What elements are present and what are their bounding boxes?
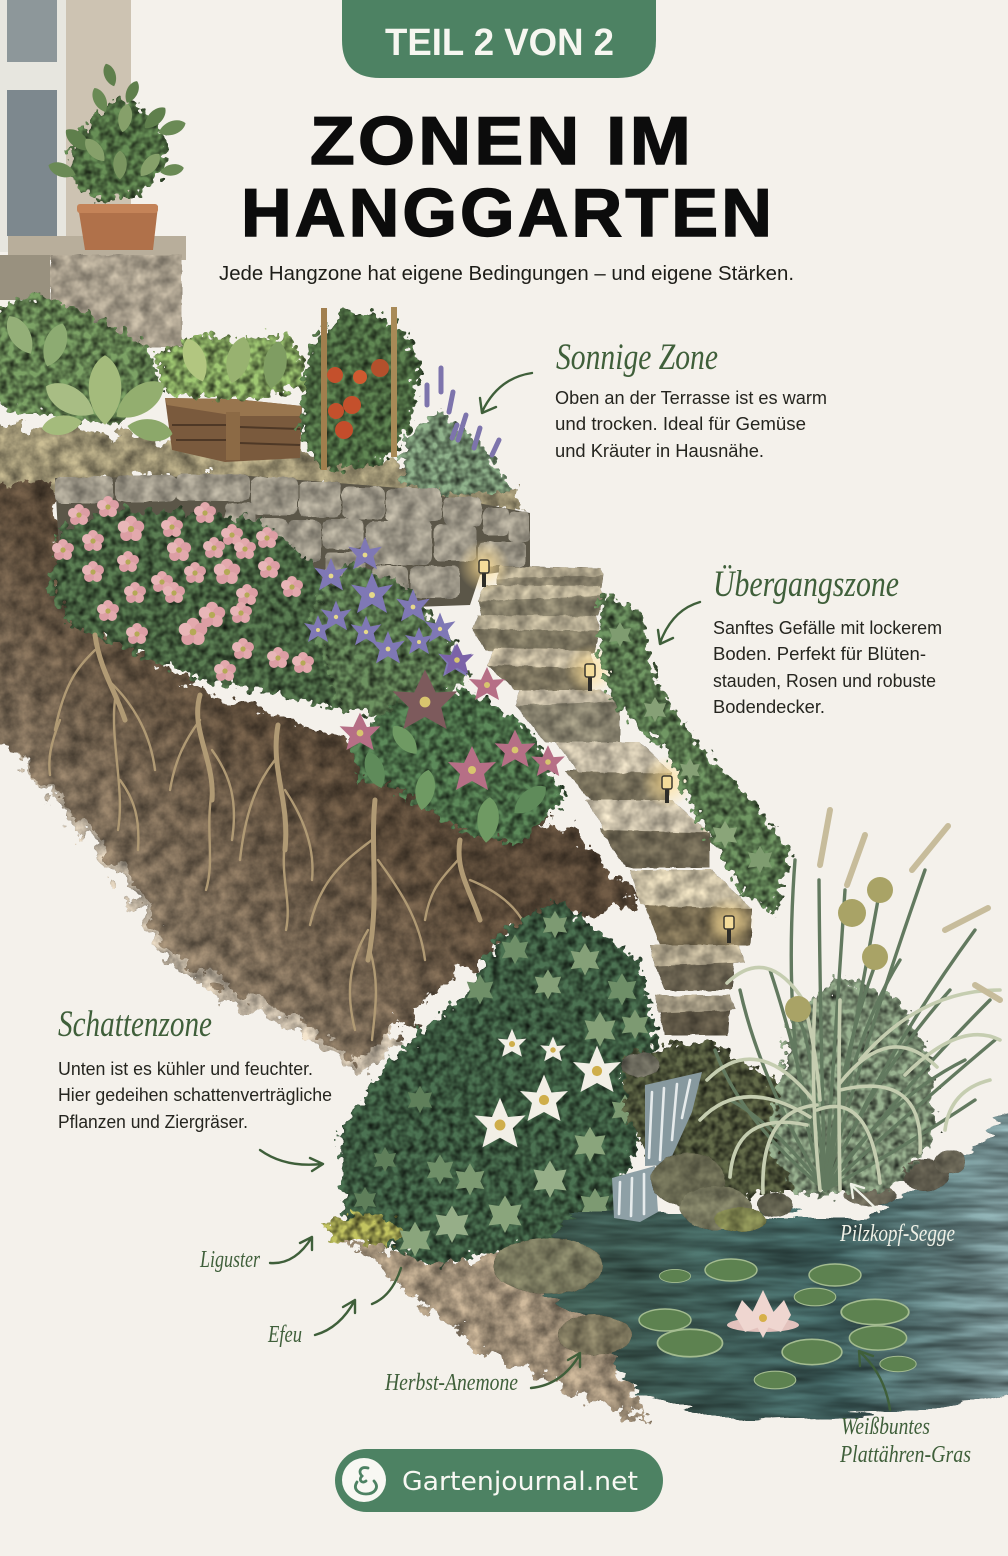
lavender: [400, 368, 515, 497]
potted plant: [46, 62, 188, 250]
arrow: transition zone: [658, 602, 700, 644]
soil cross-section: [0, 470, 640, 1075]
subtitle: Jede Hangzone hat eigene Bedingungen – und eigene Stärken.: [219, 262, 794, 285]
hellebores: [340, 643, 565, 845]
label: Pilzkopf-Segge: Pilzkopf-Segge: [839, 1221, 955, 1247]
text block: sunny zone: und trocken. Ideal für Gemüse: [555, 414, 806, 434]
water lily: [727, 1290, 799, 1338]
badge: part 2 of 2: TEIL 2 VON 2: [385, 22, 614, 64]
text block: sunny zone: [555, 337, 827, 461]
title: ZONEN IM: [310, 103, 694, 179]
terrace ground: [0, 420, 520, 510]
text block: shade zone: Hier gedeihen schattenverträgliche: [58, 1085, 332, 1105]
label: Weißbuntes Plattähren-Gras: Weißbuntes: [841, 1414, 930, 1440]
bellflowers: [304, 537, 472, 720]
arrow: sunny zone: [480, 373, 532, 413]
stone steps: [472, 566, 752, 1035]
text block: sunny zone: Oben an der Terrasse ist es warm: [555, 388, 827, 408]
pond rocks: [493, 1053, 966, 1355]
text block: transition zone: stauden, Rosen und robuste: [713, 671, 936, 691]
text block: shade zone: Pflanzen und Ziergräser.: [58, 1112, 248, 1132]
label: Herbst-Anemone: Herbst-Anemone: [384, 1370, 518, 1396]
waterfall: [612, 1072, 702, 1222]
title: HANGGARTEN: [241, 175, 775, 251]
text block: transition zone: Bodendecker.: [713, 697, 825, 717]
title: [241, 103, 775, 251]
footer brand pill: [335, 1449, 663, 1512]
shade planting: ivy and privet: [322, 900, 658, 1425]
terrace vegetables: [0, 295, 310, 444]
raised bed: [165, 398, 302, 462]
text block: sunny zone: und Kräuter in Hausnähe.: [555, 441, 764, 461]
step lamps: [458, 540, 755, 948]
tomato plants: [300, 307, 420, 470]
shrubs beside the steps: [600, 595, 790, 915]
arrow: Liguster: [270, 1237, 312, 1263]
label: Weißbuntes Plattähren-Gras: [839, 1414, 971, 1468]
leader line: Efeu: [372, 1268, 401, 1304]
arrow: Plattähren-Gras: [859, 1351, 890, 1410]
text block: sunny zone: Sonnige Zone: [556, 337, 718, 378]
arrow: Pilzkopf-Segge: [851, 1184, 879, 1212]
text block: transition zone: Boden. Perfekt für Blüten-: [713, 644, 926, 664]
root systems: [49, 635, 525, 1040]
arrow: Herbst-Anemone: [531, 1353, 580, 1388]
pink flower cushion: [50, 496, 360, 710]
mossy bank behind the waterfall: [625, 1040, 800, 1200]
footer brand pill: Gartenjournal.net: [402, 1467, 638, 1497]
arrow: Efeu: [315, 1300, 355, 1335]
text block: transition zone: [713, 564, 942, 717]
text block: shade zone: Unten ist es kühler und feuchter.: [58, 1059, 313, 1079]
label: Weißbuntes Plattähren-Gras: Plattähren-Gras: [839, 1442, 971, 1468]
house corner with window: [0, 0, 186, 347]
label: Efeu: Efeu: [267, 1322, 302, 1348]
dry stone wall: [55, 474, 530, 610]
pond: [540, 1110, 1008, 1420]
text block: transition zone: Übergangszone: [713, 564, 899, 605]
variegated grass clump: [700, 810, 1000, 1195]
text block: shade zone: Schattenzone: [58, 1004, 212, 1045]
badge: part 2 of 2: [342, 0, 656, 78]
icon: sprout logo: [355, 1468, 376, 1494]
text block: shade zone: [58, 1004, 332, 1132]
label: Liguster: Liguster: [199, 1247, 260, 1273]
arrow: shade zone: [260, 1150, 323, 1171]
text block: transition zone: Sanftes Gefälle mit lockerem: [713, 618, 942, 638]
